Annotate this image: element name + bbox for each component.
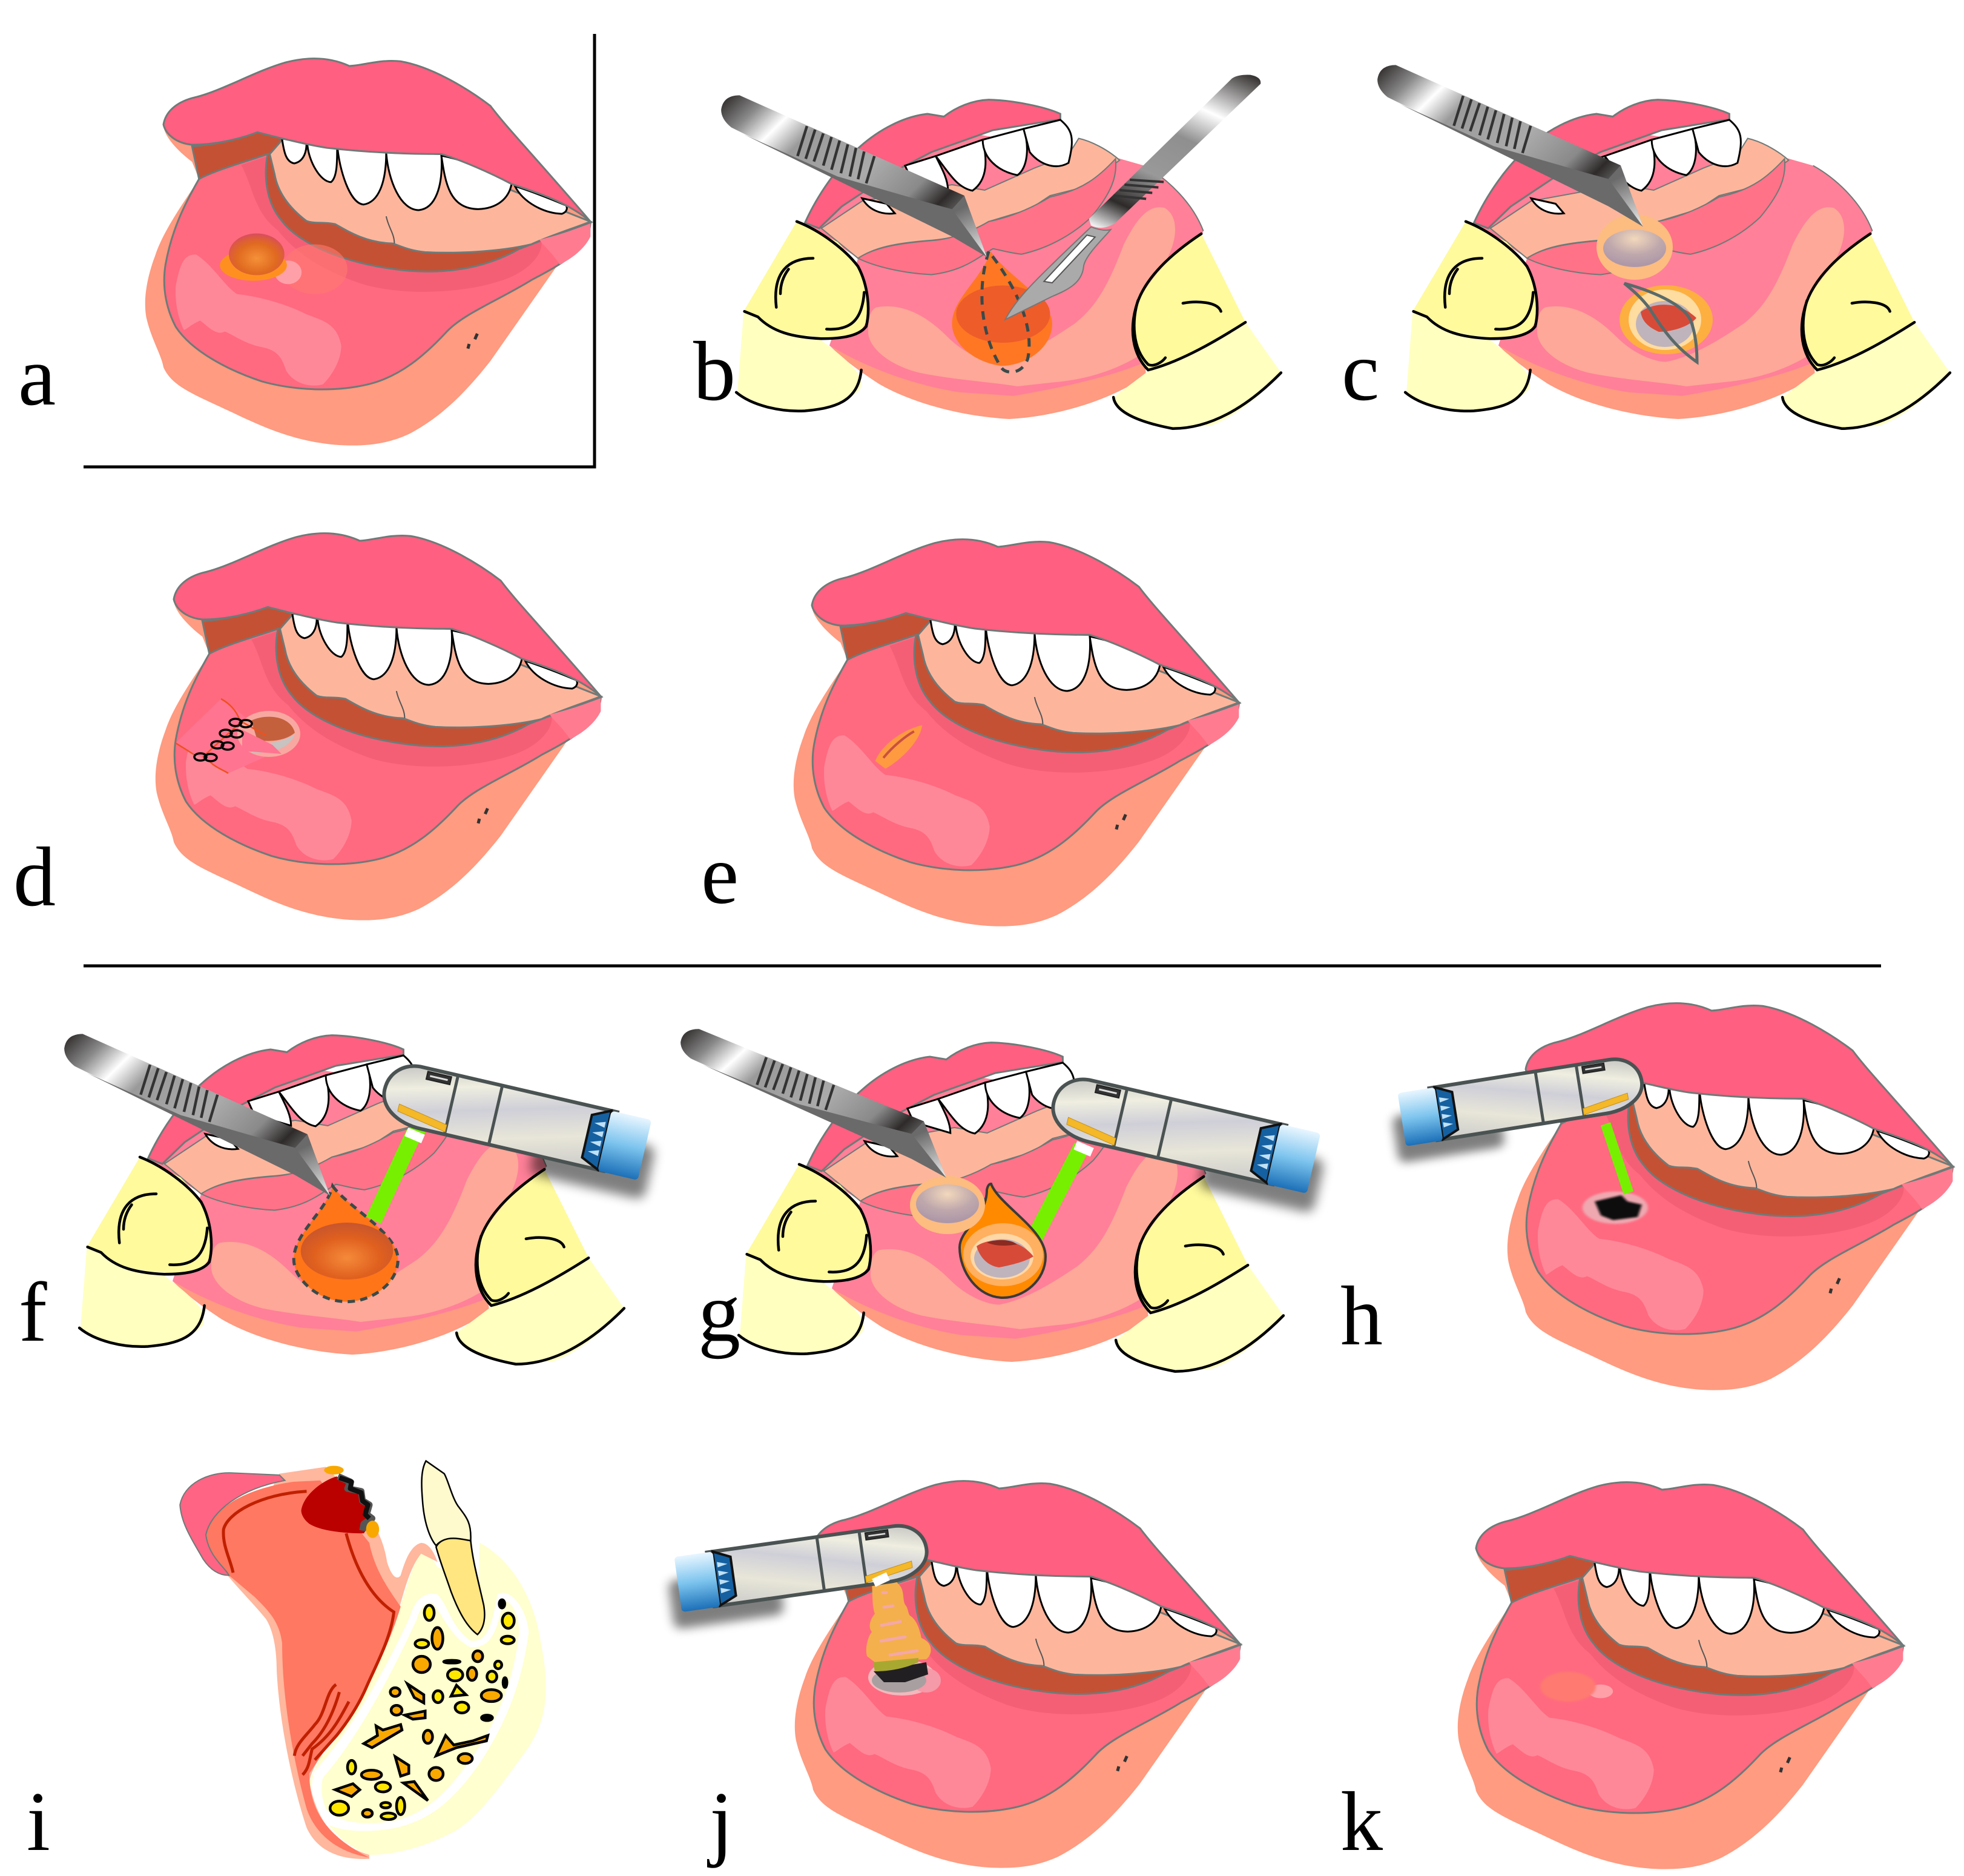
axis lines a [84, 34, 595, 467]
panel j: low-level laser therapy [665, 1481, 1240, 1869]
panel i: cross-section of lip and bone [180, 1461, 546, 1859]
treated area j [868, 1659, 941, 1696]
label b: b [693, 325, 736, 418]
wound g [960, 1184, 1046, 1298]
lip [180, 1473, 285, 1576]
label j: j [707, 1775, 733, 1869]
white emitter tip j [879, 1576, 883, 1584]
excised tissue g [910, 1176, 985, 1234]
excised tissue c [1597, 214, 1673, 280]
mouth illustration f [79, 1035, 624, 1364]
label d: d [13, 830, 56, 924]
panel b: scalpel incision [693, 75, 1281, 429]
gold tips [324, 1466, 379, 1538]
mouth illustration j [795, 1481, 1240, 1868]
laser beam g [1034, 1146, 1082, 1238]
label h: h [1340, 1269, 1383, 1363]
divider [84, 964, 1881, 968]
white emitter tip g [1082, 1144, 1086, 1153]
laser beam h [1606, 1124, 1629, 1193]
lesion f with dashed outline [294, 1186, 398, 1302]
sutured flap and wound d [176, 699, 300, 773]
lesion b with dashed incision [952, 251, 1052, 372]
laser beam f [374, 1126, 419, 1220]
label f: f [19, 1266, 47, 1359]
laser handpiece h [1388, 1055, 1649, 1163]
scalpel b [1005, 75, 1260, 320]
mouth illustration k [1458, 1482, 1903, 1869]
mouth illustration b [736, 100, 1281, 429]
mouth illustration e [794, 540, 1239, 926]
healed spot k [1540, 1672, 1613, 1702]
mouth illustration g [739, 1043, 1284, 1372]
label a: a [18, 329, 56, 423]
label g: g [698, 1266, 740, 1359]
label i: i [27, 1775, 50, 1869]
mucosa outer [228, 1467, 437, 1859]
panel g: lesion removed with laser [680, 1029, 1331, 1372]
muscle tissue [205, 1481, 401, 1858]
light cone j [866, 1579, 931, 1671]
panel a: side view of mouth with lesion [18, 34, 595, 467]
closed incision e [875, 725, 922, 768]
coagulated lesion [302, 1476, 372, 1533]
panel e: healed incision [701, 540, 1239, 926]
bone outer [309, 1543, 546, 1855]
label c: c [1342, 325, 1379, 418]
forceps b [721, 95, 987, 257]
trabeculae [330, 1600, 514, 1820]
laser handpiece g [1043, 1073, 1331, 1214]
charred area h [1583, 1192, 1648, 1224]
lesion a [220, 234, 348, 294]
label e: e [701, 828, 739, 922]
label k: k [1340, 1775, 1383, 1869]
tooth [421, 1461, 484, 1634]
forceps f [64, 1034, 330, 1195]
forceps g [680, 1029, 946, 1178]
charred crust [338, 1476, 372, 1531]
panel k: final healing [1340, 1482, 1903, 1869]
cortical white layer [312, 1593, 529, 1831]
white emitter tip f [413, 1131, 417, 1140]
wound c [1620, 283, 1713, 362]
cancellous bone [321, 1601, 519, 1823]
panel f: laser excision with forceps [19, 1034, 662, 1364]
laser handpiece j [665, 1522, 933, 1630]
mouth illustration h [1508, 1003, 1952, 1390]
panel c: tissue removal [1342, 65, 1950, 429]
red nerve and border lines [223, 1491, 394, 1775]
panel d: sutured wound [13, 533, 601, 924]
mouth illustration a [145, 59, 590, 446]
mouth illustration c [1405, 100, 1950, 429]
panel h: laser coagulation side view [1340, 1003, 1952, 1390]
laser handpiece f [374, 1060, 662, 1200]
mouth illustration d [156, 533, 601, 920]
forceps c [1377, 65, 1643, 226]
